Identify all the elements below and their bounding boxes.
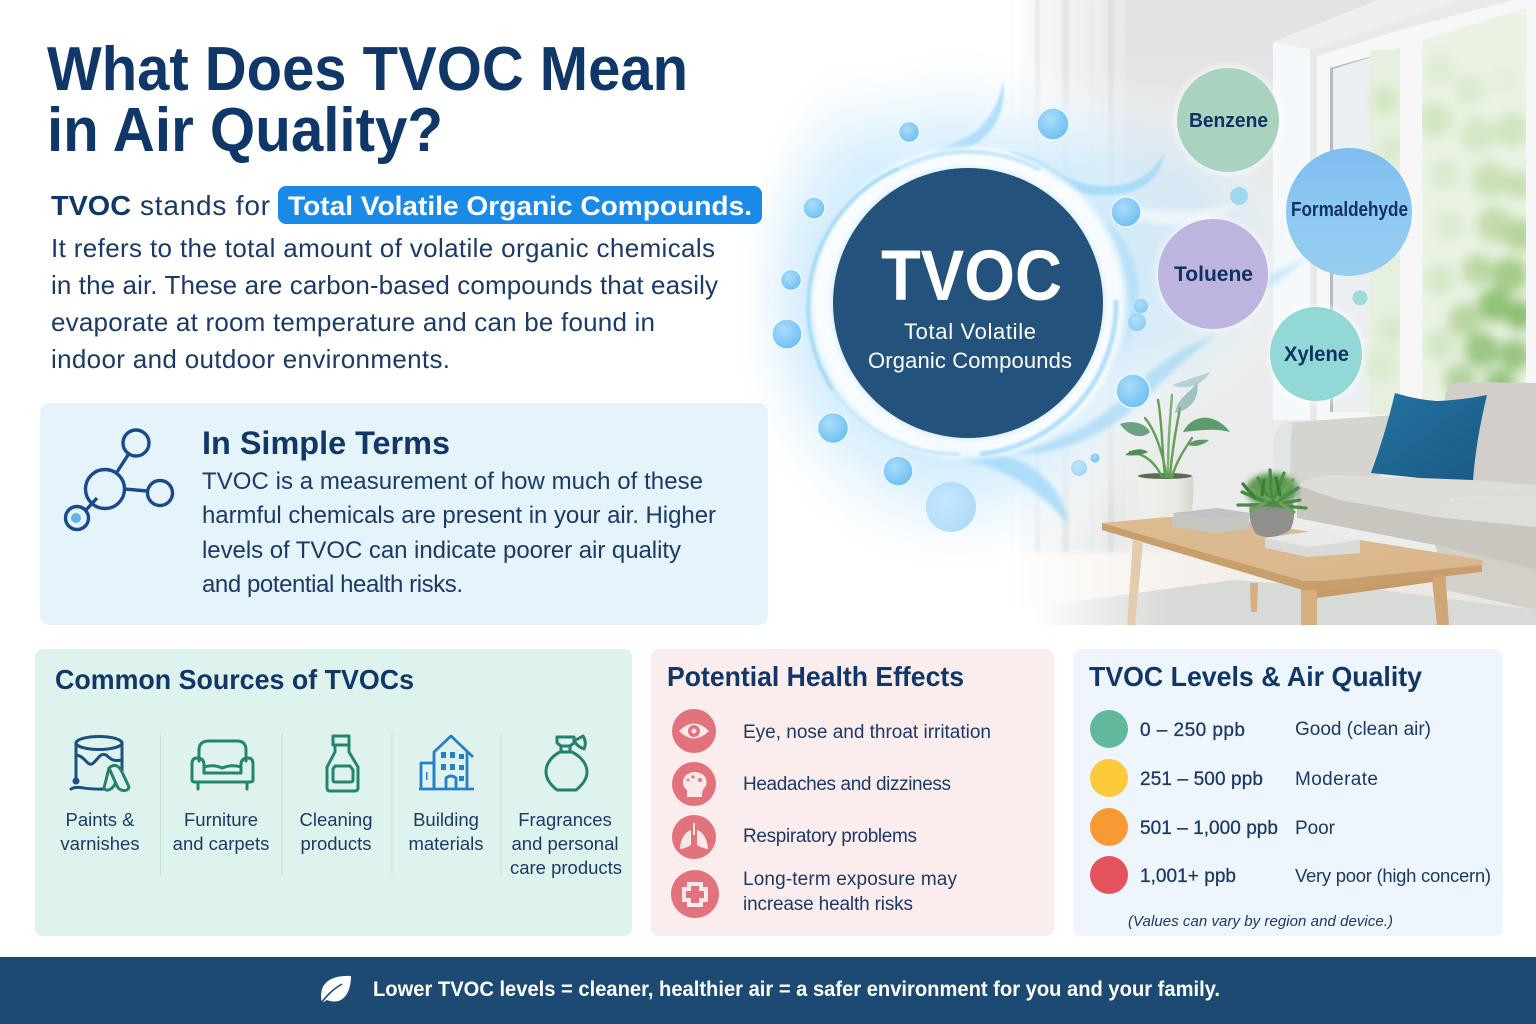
throw pillow bbox=[1371, 393, 1487, 480]
window recess bbox=[1273, 0, 1536, 420]
level: moderate: Moderate bbox=[1295, 769, 1378, 790]
footer banner: Lower TVOC levels = cleaner, healthier air = a safer environment for you and your family. bbox=[373, 978, 1220, 1001]
level: good: 0 – 250 ppb bbox=[1140, 720, 1245, 741]
TVOC central circle: Total Volatile bbox=[904, 319, 1036, 344]
room photograph background bbox=[1033, 0, 1536, 625]
title: What Does TVOC Mean bbox=[47, 35, 688, 104]
air droplets bbox=[772, 108, 1368, 532]
definition text: in the air. These are carbon-based compounds that easily bbox=[51, 270, 718, 300]
icon: cleaning bottle bbox=[327, 736, 358, 791]
source label: cleaning: products bbox=[301, 833, 371, 854]
title: in Air Quality? bbox=[47, 96, 443, 165]
heading: Potential Health Effects bbox=[667, 661, 964, 692]
level: poor: Poor bbox=[1295, 818, 1336, 839]
highlighted term pill: Total Volatile Organic Compounds. bbox=[288, 191, 752, 221]
level: very poor: Very poor (high concern) bbox=[1295, 865, 1491, 886]
level: poor: 501 – 1,000 ppb bbox=[1140, 818, 1278, 839]
definition text: TVOC bbox=[51, 190, 131, 221]
definition text bbox=[51, 186, 762, 374]
ring around TVOC circle bbox=[808, 152, 1116, 454]
compound bubble: Benzene: Benzene bbox=[1189, 110, 1268, 132]
sofa bbox=[1274, 382, 1536, 610]
icon: perfume bottle bbox=[546, 736, 587, 790]
body text: TVOC is a measurement of how much of these bbox=[202, 468, 703, 495]
body text: harmful chemicals are present in your air. Higher bbox=[202, 502, 716, 529]
soft blue air glow bbox=[720, 35, 1320, 585]
footer banner bbox=[0, 957, 1536, 1024]
icon: sofa bbox=[192, 741, 253, 789]
level: very poor bbox=[1090, 856, 1491, 894]
level: good: Good (clean air) bbox=[1295, 719, 1431, 740]
floor bbox=[1010, 550, 1532, 610]
source label: building bbox=[408, 809, 484, 854]
TVOC central circle: Organic Compounds bbox=[868, 348, 1072, 373]
source label: building: materials bbox=[408, 833, 484, 854]
body text bbox=[202, 468, 716, 598]
wooden coffee table bbox=[1102, 517, 1483, 625]
source label: cleaning: Cleaning bbox=[299, 809, 373, 830]
TVOC central circle: TVOC bbox=[881, 237, 1062, 316]
definition text: It refers to the total amount of volatile organic chemicals bbox=[51, 233, 715, 263]
body text: and potential health risks. bbox=[202, 571, 463, 598]
text: long-term exposure: Long-term exposure may bbox=[743, 869, 958, 890]
curtain bbox=[1010, 0, 1119, 552]
level: poor bbox=[1090, 808, 1336, 846]
compound bubble: Xylene: Xylene bbox=[1284, 343, 1349, 366]
rug bbox=[1074, 580, 1536, 625]
level: moderate: 251 – 500 ppb bbox=[1140, 769, 1263, 790]
text: respiratory: Respiratory problems bbox=[743, 826, 917, 847]
text: headaches: Headaches and dizziness bbox=[743, 774, 951, 795]
source label: fragrances: care products bbox=[510, 857, 622, 878]
definition text: evaporate at room temperature and can be found in bbox=[51, 307, 655, 337]
definition text: indoor and outdoor environments. bbox=[51, 344, 450, 374]
panel: TVOC Levels & Air Quality bbox=[1073, 649, 1503, 936]
compound bubble: Formaldehyde: Formaldehyde bbox=[1291, 199, 1408, 221]
source label: building: Building bbox=[413, 809, 479, 830]
panel: Common Sources of TVOCs bbox=[35, 649, 632, 936]
level: moderate bbox=[1090, 759, 1378, 797]
fern leaves bbox=[1238, 470, 1306, 512]
icon: leaf bbox=[320, 976, 351, 1005]
icon: medical cross bbox=[671, 870, 719, 918]
compound bubble: Benzene bbox=[1173, 64, 1283, 176]
source label: furniture: and carpets bbox=[173, 833, 269, 854]
TVOC central circle bbox=[833, 168, 1103, 438]
source label: furniture bbox=[173, 809, 269, 854]
footnote: (Values can vary by region and device.) bbox=[1128, 913, 1393, 930]
window view: trees bbox=[1330, 8, 1536, 415]
body text: levels of TVOC can indicate poorer air quality bbox=[202, 537, 681, 564]
source label: fragrances bbox=[510, 809, 622, 878]
furniture in front of the glow bbox=[1102, 372, 1483, 625]
compound bubble: Formaldehyde bbox=[1286, 148, 1412, 276]
panel: Potential Health Effects bbox=[651, 649, 1054, 936]
heading: Common Sources of TVOCs bbox=[55, 664, 414, 695]
source label: cleaning bbox=[299, 809, 373, 854]
text: long-term exposure bbox=[743, 869, 958, 915]
level: very poor: 1,001+ ppb bbox=[1140, 866, 1236, 887]
compound bubble: Xylene bbox=[1267, 304, 1365, 404]
source label: furniture: Furniture bbox=[184, 809, 258, 830]
icon: building bbox=[419, 736, 474, 789]
source label: paints: varnishes bbox=[60, 833, 140, 854]
potted plant bbox=[1120, 372, 1230, 519]
source label: paints bbox=[60, 809, 140, 854]
heading: In Simple Terms bbox=[202, 425, 450, 461]
panel: In Simple Terms bbox=[40, 403, 768, 625]
text: eye irritation: Eye, nose and throat irritation bbox=[743, 722, 991, 743]
icon: paint can bbox=[71, 736, 129, 791]
level: good bbox=[1090, 710, 1431, 748]
icon: lungs bbox=[672, 815, 716, 859]
blue air swirls bbox=[900, 80, 1310, 525]
books and small plant bbox=[1172, 470, 1360, 557]
source label: paints: Paints & bbox=[66, 809, 135, 830]
heading: TVOC Levels & Air Quality bbox=[1089, 661, 1422, 692]
icon: eye bbox=[672, 709, 716, 753]
definition text: stands for bbox=[140, 190, 270, 221]
compound bubble: Toluene: Toluene bbox=[1174, 263, 1253, 286]
source label: fragrances: and personal bbox=[512, 833, 618, 854]
icon: head bbox=[672, 762, 716, 806]
compound bubble: Toluene bbox=[1155, 216, 1271, 332]
title bbox=[47, 35, 688, 165]
text: long-term exposure: increase health risks bbox=[743, 894, 913, 915]
source label: fragrances: Fragrances bbox=[518, 809, 612, 830]
icon: molecule bbox=[66, 430, 172, 530]
